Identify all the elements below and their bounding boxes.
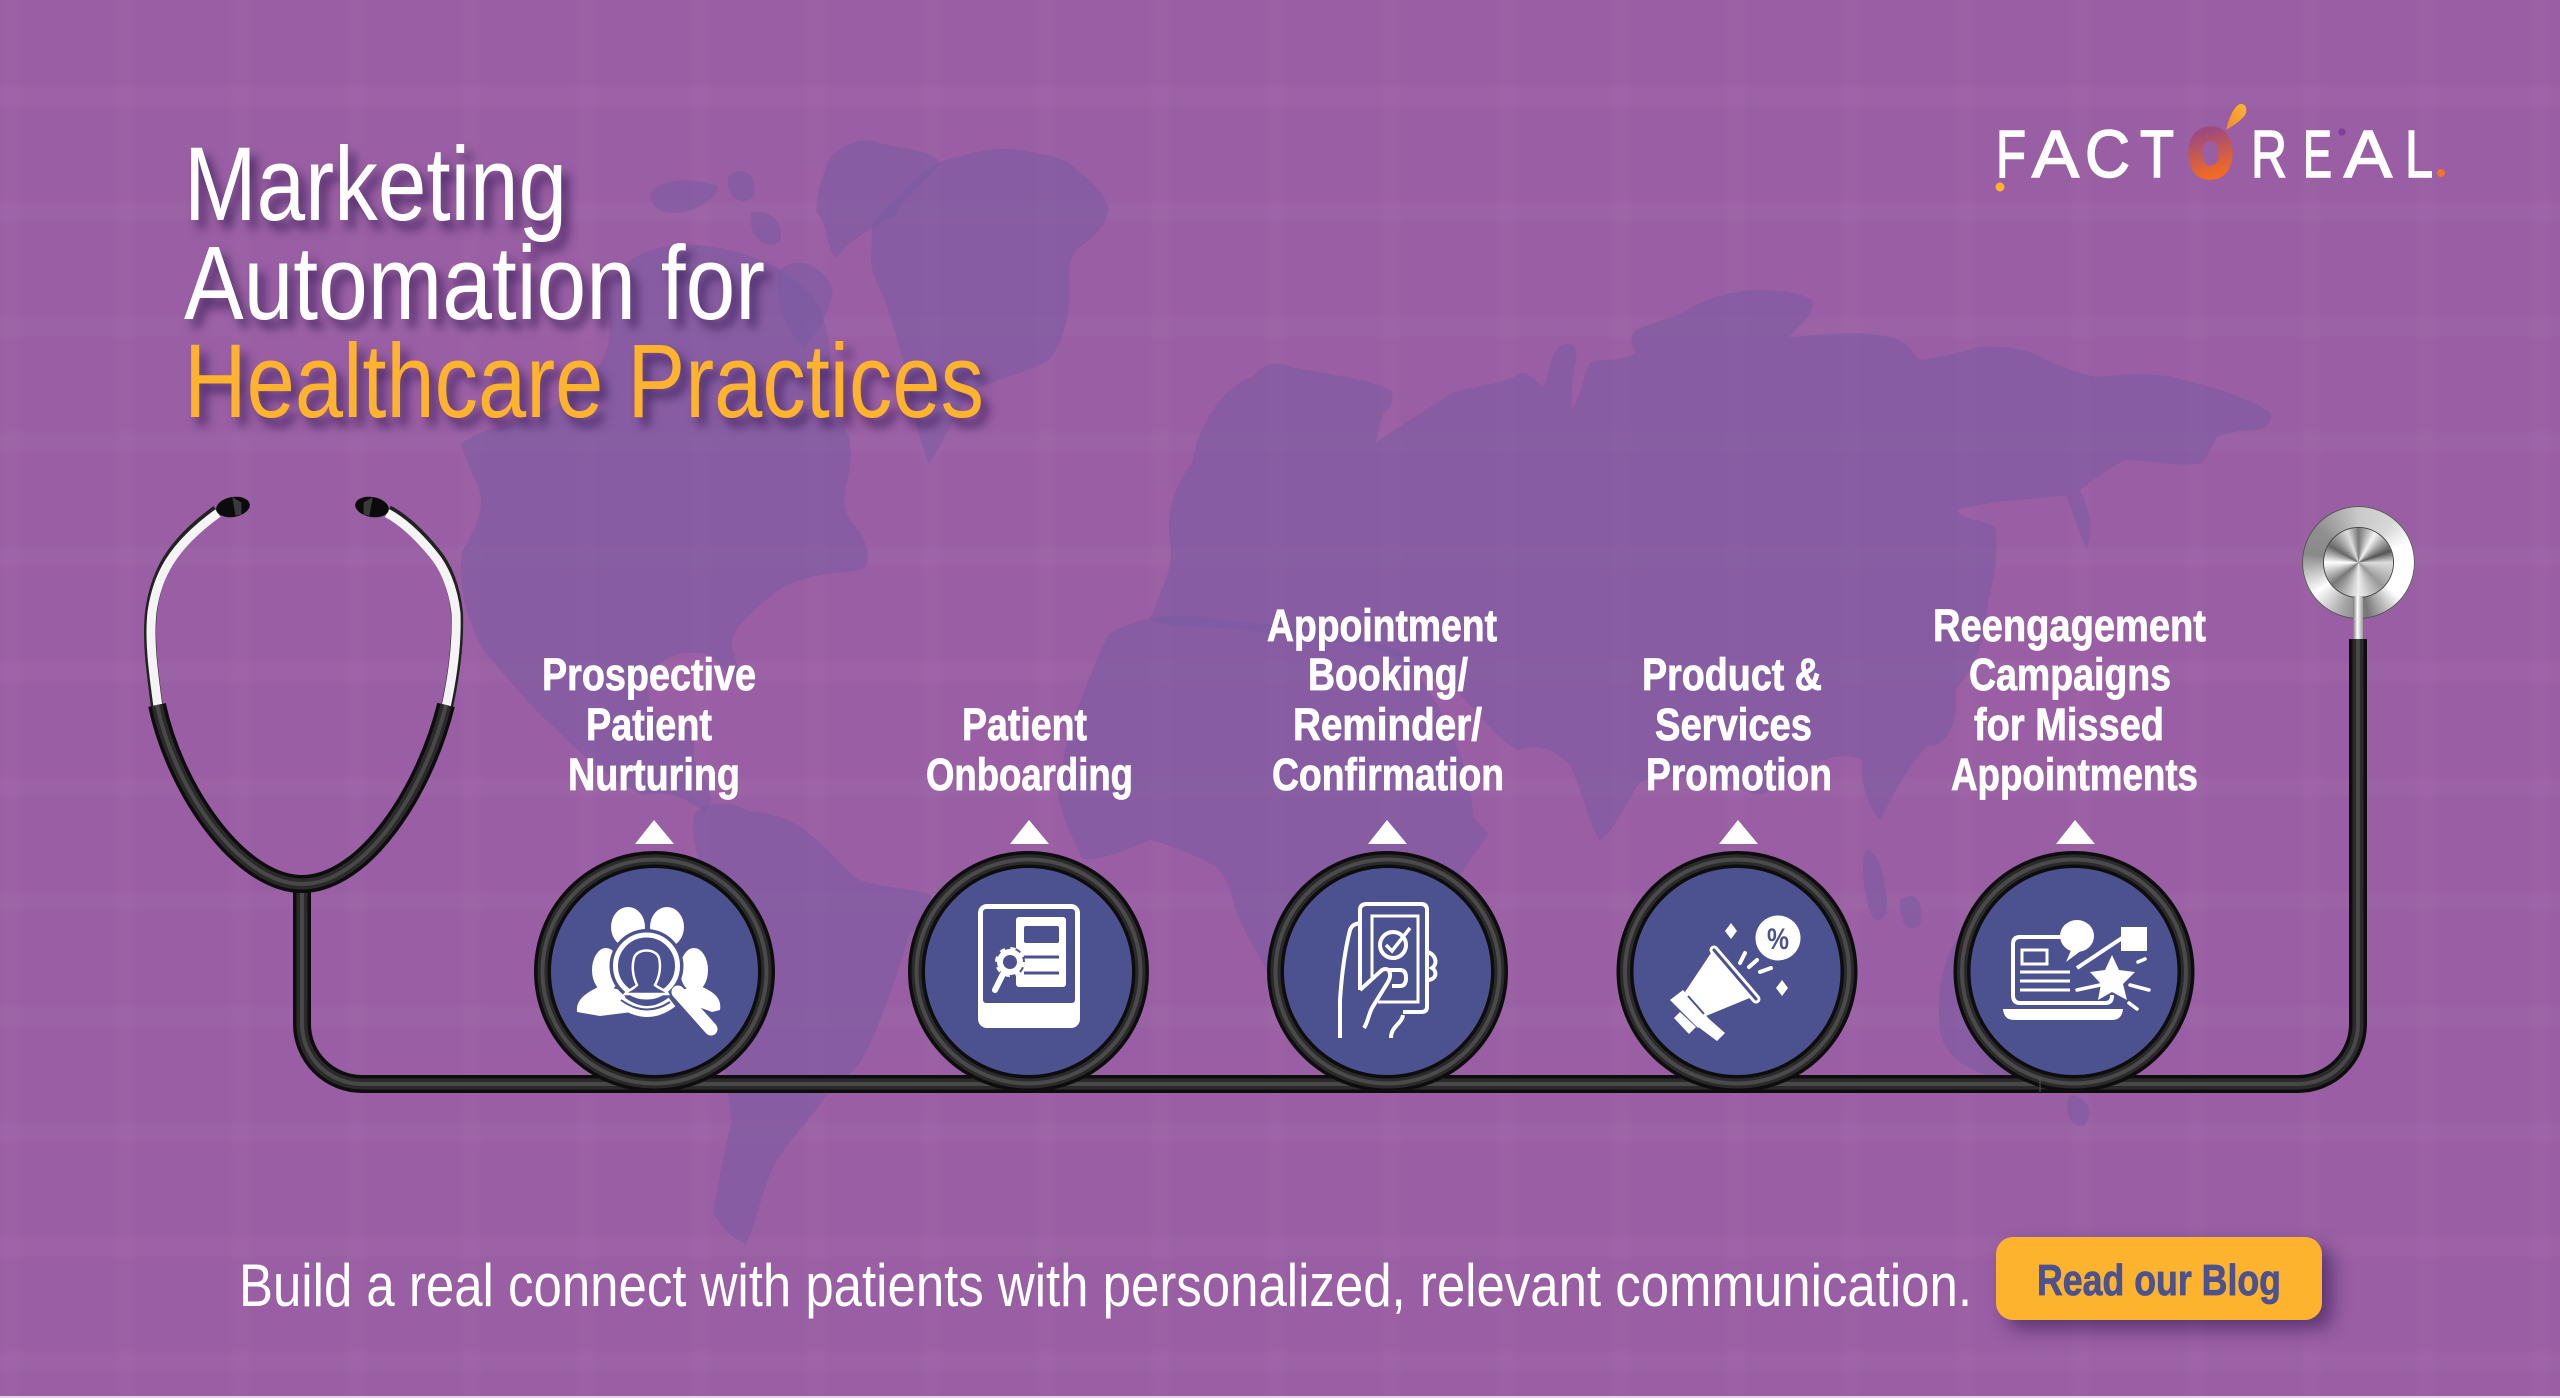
step 2 label: Patient [962, 699, 1087, 750]
logo wordmark: E [2303, 117, 2332, 192]
step 3: appointment booking reminder confirmation [1267, 600, 1504, 1084]
logo wordmark: A [2032, 117, 2079, 192]
step 4 label: Product & [1642, 649, 1822, 700]
step 5 label: Reengagement [1933, 600, 2206, 651]
icon: laptop with chat, star, square [2003, 920, 2149, 1020]
step 5 pointer [2056, 820, 2095, 844]
stethoscope: ear tubes and tips [150, 494, 457, 884]
map: africa [1058, 616, 1488, 1077]
left silver ear tube [150, 511, 217, 707]
stethoscope tube main line [302, 639, 2358, 1084]
logo: factoreal [1996, 104, 2445, 192]
map: south america [693, 804, 931, 1244]
step 1 label [542, 649, 756, 800]
logo wordmark: R [2251, 117, 2287, 192]
step 2 ring [916, 860, 1140, 1084]
step 1: prospective patient nurturing [542, 649, 766, 1084]
map: europe and asia [1150, 290, 2271, 840]
title line 1: Marketing [184, 126, 567, 243]
logo wordmark: O [2189, 116, 2232, 190]
step 3 label: Reminder/ [1293, 699, 1482, 750]
step 2 label [926, 699, 1133, 800]
tube seam [2039, 1076, 2041, 1092]
map: australia and islands [1863, 850, 2161, 1126]
right silver ear tube [388, 511, 457, 707]
logo wordmark: L [2405, 117, 2433, 192]
step 2 label: Onboarding [926, 749, 1133, 800]
step 3 label: Appointment [1267, 600, 1497, 651]
step 5 label [1933, 600, 2206, 800]
step 4 ring [1625, 860, 1849, 1084]
title line 2: Automation for [184, 225, 765, 342]
step 1 label: Patient [586, 699, 712, 750]
step 4 label [1642, 649, 1832, 800]
step 4 label: Promotion [1646, 749, 1832, 800]
step 5 label: Campaigns [1969, 649, 2171, 700]
step 3 label: Confirmation [1272, 749, 1504, 800]
right ear tip [354, 494, 390, 520]
world map background [460, 141, 2271, 1244]
step 5 label: Appointments [1951, 749, 2198, 800]
logo dots [1996, 128, 2445, 192]
step 2: patient onboarding [916, 699, 1140, 1084]
step 3 ring [1276, 860, 1500, 1084]
stethoscope chest piece [2302, 506, 2415, 639]
step 1 ring [542, 860, 766, 1084]
step 4 pointer [1719, 820, 1758, 844]
icon: onboarding form with gear [978, 904, 1080, 1028]
step 3 label: Booking/ [1308, 649, 1468, 700]
button: read our blog [1996, 1237, 2322, 1320]
bottom edge line [0, 1396, 2560, 1398]
step 5: reengagement campaigns [1933, 600, 2206, 1084]
step 4: product and services promotion [1625, 649, 1849, 1084]
step 3 pointer [1368, 820, 1407, 844]
step 2 pointer [1010, 820, 1049, 844]
logo drop accent [2226, 104, 2246, 130]
percent sign on badge: % [1767, 923, 1789, 956]
logo wordmark: A [2344, 117, 2392, 192]
step 4 label: Services [1655, 699, 1812, 750]
map: north america [460, 245, 868, 813]
logo wordmark: T [2140, 117, 2174, 192]
step 1 pointer [635, 820, 674, 844]
logo wordmark: C [2085, 117, 2130, 192]
y-shaped binaural tube [157, 705, 446, 884]
left ear tip [215, 494, 251, 520]
step 3 label [1267, 600, 1504, 800]
button label: Read our Blog [2037, 1256, 2281, 1305]
map: greenland [871, 149, 1109, 464]
title line 3 highlighted: Healthcare Practices [184, 323, 984, 440]
title [184, 126, 984, 440]
step 1 label: Prospective [542, 649, 756, 700]
step 5 label: for Missed [1974, 699, 2164, 750]
icon: megaphone with percent badge [1670, 916, 1800, 1041]
icon: hand holding phone with check [1340, 904, 1435, 1038]
logo wordmark: F [1996, 117, 2026, 192]
map: arctic islands [651, 141, 940, 346]
icon: people under magnifier [577, 907, 720, 1029]
step 1 label: Nurturing [568, 749, 740, 800]
step 5 ring [1962, 860, 2186, 1084]
tagline: Build a real connect with patients with personalized, relevant communication. [239, 1252, 1972, 1319]
